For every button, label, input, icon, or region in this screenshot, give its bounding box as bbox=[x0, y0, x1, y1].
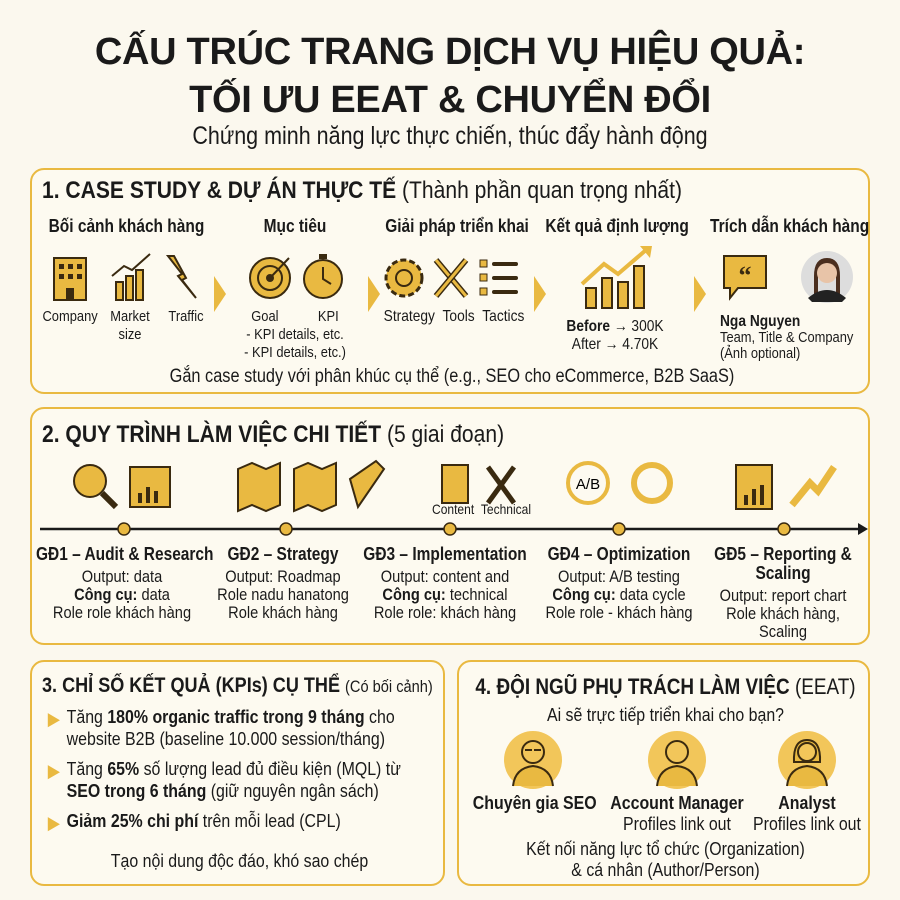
arrow bbox=[368, 276, 380, 312]
panel: case study: size bbox=[119, 326, 141, 343]
stage 5: Scaling bbox=[759, 622, 807, 641]
role: account manager: Account Manager bbox=[610, 792, 744, 813]
panel: KPIs bbox=[30, 660, 445, 886]
kpi 1: ▶ bbox=[48, 708, 60, 729]
stage 4: Role role - khách hàng bbox=[545, 603, 693, 622]
panel: case study: Market bbox=[110, 308, 150, 325]
kpi 3: Giảm 25% chi phí trên mỗi lead (CPL) bbox=[67, 810, 341, 831]
column: client context: Bối cảnh khách hàng bbox=[49, 216, 204, 236]
panel: workflow bbox=[30, 407, 870, 645]
panel: case study: Traffic bbox=[168, 308, 204, 325]
role: analyst: Analyst bbox=[778, 792, 836, 813]
stage 4: Công cụ: data cycle bbox=[552, 585, 686, 604]
icons: goal kpi bbox=[249, 254, 343, 299]
stage 5: Output: report chart bbox=[720, 586, 846, 605]
stage 5 bbox=[714, 544, 852, 641]
role: account manager: Profiles link out bbox=[623, 813, 731, 834]
stage 3: Output: content and bbox=[381, 567, 509, 586]
panel: case study bbox=[30, 168, 870, 394]
panel: case study: Goal KPI bbox=[251, 308, 339, 325]
column: testimonial: Trích dẫn khách hàng bbox=[710, 216, 869, 236]
arrow bbox=[214, 276, 226, 312]
connection note: Kết nối năng lực tổ chức (Organization) bbox=[526, 838, 805, 859]
panel heading: 2. QUY TRÌNH LÀM VIỆC CHI TIẾT (5 giai đoạn) bbox=[42, 421, 504, 448]
stage 2: Role khách hàng bbox=[228, 603, 338, 622]
panel heading: 3. CHỈ SỐ KẾT QUẢ (KPIs) CỤ THỂ (Có bối cảnh) bbox=[42, 674, 433, 697]
stage 1: Output: data bbox=[82, 567, 162, 586]
icon: growth chart bbox=[580, 246, 652, 309]
stage 2 bbox=[217, 544, 349, 622]
footer note: Gắn case study với phân khúc cụ thể (e.g., SEO cho eCommerce, B2B SaaS) bbox=[170, 366, 734, 387]
stage 2: Role nadu hanatong bbox=[217, 585, 349, 604]
subheading: Ai sẽ trực tiếp triển khai cho bạn? bbox=[547, 704, 784, 725]
stage 2: GĐ2 – Strategy bbox=[228, 544, 338, 564]
stage 3 bbox=[363, 544, 527, 622]
panel: case study: Company bbox=[42, 308, 98, 325]
stage 5: Scaling bbox=[755, 563, 811, 583]
stage 5: GĐ5 – Reporting & bbox=[714, 544, 852, 564]
arrow bbox=[694, 276, 706, 312]
icons: stage icons: A/B bbox=[576, 476, 600, 493]
role: analyst: Profiles link out bbox=[753, 813, 861, 834]
stage 1: Role role khách hàng bbox=[53, 603, 191, 622]
stage 3: Role role: khách hàng bbox=[374, 603, 516, 622]
icons: strategy tools tactics bbox=[384, 258, 518, 298]
stage 3: GĐ3 – Implementation bbox=[363, 544, 527, 564]
panel: case study: After → 4.70K bbox=[572, 336, 658, 353]
stage 1 bbox=[36, 544, 214, 622]
column: quantitative results: Kết quả định lượng bbox=[545, 216, 689, 236]
icon labels: Content Technical bbox=[432, 501, 531, 517]
stage 4: Output: A/B testing bbox=[558, 567, 680, 586]
panel: case study: - KPI details, etc.) bbox=[244, 344, 346, 361]
connection note bbox=[526, 838, 805, 880]
kpi 2: SEO trong 6 tháng (giữ nguyên ngân sách) bbox=[67, 780, 379, 801]
stage 5: Role khách hàng, bbox=[726, 604, 840, 623]
stage 4: GĐ4 – Optimization bbox=[548, 544, 690, 564]
stage 3: Công cụ: technical bbox=[382, 585, 508, 604]
panel: case study: (Ảnh optional) bbox=[720, 345, 800, 362]
icons: stage icons bbox=[73, 460, 837, 512]
kpi 2: ▶ bbox=[48, 760, 60, 781]
icons: company market traffic bbox=[53, 253, 197, 301]
panel: case study: Team, Title & Company bbox=[720, 329, 853, 346]
column: goals bbox=[244, 216, 346, 361]
icon: quote bubble bbox=[723, 255, 767, 301]
panel: case study: Nga Nguyen bbox=[720, 313, 800, 330]
kpi 2 bbox=[48, 758, 401, 801]
subtitle: Chứng minh năng lực thực chiến, thúc đẩy hành động bbox=[192, 122, 708, 150]
kpi 3: ▶ bbox=[48, 812, 60, 833]
icon: avatar photo bbox=[801, 251, 853, 303]
role: SEO expert: Chuyên gia SEO bbox=[473, 792, 597, 813]
kpi 1: Tăng 180% organic traffic trong 9 tháng cho website B2B (baseline 10.000 session/tháng) bbox=[67, 706, 395, 749]
panel heading: 1. CASE STUDY & DỰ ÁN THỰC TẾ (Thành phần quan trọng nhất) bbox=[42, 177, 682, 204]
note: Tạo nội dung độc đáo, khó sao chép bbox=[111, 850, 368, 871]
panel: case study: Strategy Tools Tactics bbox=[384, 308, 524, 325]
connection note: & cá nhân (Author/Person) bbox=[571, 859, 760, 880]
panel heading: 4. ĐỘI NGŨ PHỤ TRÁCH LÀM VIỆC (EEAT) bbox=[475, 674, 856, 699]
stage 1: GĐ1 – Audit & Research bbox=[36, 544, 214, 564]
column: solution: Giải pháp triển khai bbox=[385, 216, 529, 236]
stage 1: Công cụ: data bbox=[74, 585, 170, 604]
column: client context bbox=[42, 216, 204, 343]
title: CẤU TRÚC TRANG DỊCH VỤ HIỆU QUẢ: bbox=[95, 31, 805, 73]
panel: team bbox=[457, 660, 870, 886]
role: analyst bbox=[753, 792, 861, 834]
column: solution bbox=[384, 216, 529, 325]
kpi 2: Tăng 65% số lượng lead đủ điều kiện (MQL) từ bbox=[67, 758, 401, 779]
title bbox=[95, 30, 805, 121]
role: account manager bbox=[610, 792, 744, 834]
stage 2: Output: Roadmap bbox=[225, 567, 341, 586]
column: testimonial bbox=[710, 216, 869, 362]
KPI list bbox=[48, 706, 401, 833]
arrow bbox=[534, 276, 546, 312]
title: TỐI ƯU EEAT & CHUYỂN ĐỔI bbox=[189, 79, 711, 121]
timeline arrow bbox=[40, 522, 868, 536]
stage 4 bbox=[545, 544, 693, 622]
column: quantitative results bbox=[545, 216, 689, 353]
icon: quote bubble: “ bbox=[738, 261, 752, 290]
column: goals: Mục tiêu bbox=[264, 216, 326, 236]
avatars bbox=[504, 731, 836, 789]
panel: case study: Before → 300K bbox=[566, 318, 664, 335]
panel: case study: - KPI details, etc. bbox=[246, 326, 344, 343]
